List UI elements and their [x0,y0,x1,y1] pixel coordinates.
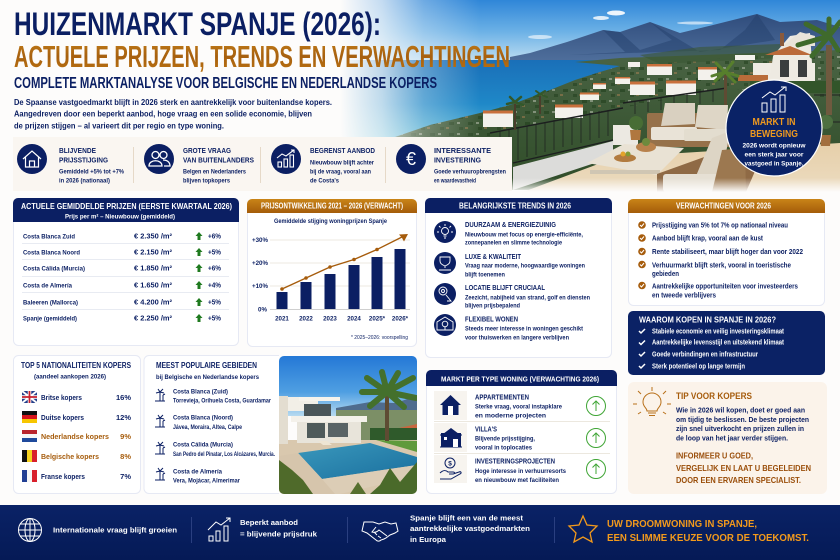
expectation text: Aanbod blijft krap, vooral aan de kust [652,234,764,242]
price rows: € 1.850 /m² [134,264,173,272]
flag: Germany [22,411,37,423]
region list: San Pedro del Pinatar, Los Alcázares, Murcia. [173,452,275,458]
trend: flexibel wonen: Steeds meer interesse in woningen geschikt [465,326,584,332]
footer item: beperkt aanbod: = blijvende prijsdruk [240,530,318,538]
panel: tip voor kopers: TIP VOOR KOPERS [676,391,752,401]
fact: interessante investering: € [406,149,416,169]
panel: waarom kopen in Spanje [628,311,825,375]
fact: grote vraag [144,144,254,184]
panel: meest populaire gebieden [144,356,279,494]
region list: Costa Blanca (Zuid) [173,388,228,396]
panel: waarom kopen in Spanje: WAAROM KOPEN IN SPANJE IN 2026? [639,314,776,324]
fact: blijvende prijsstijging [17,144,124,184]
fact: begrenst aanbod: de Costa's [310,178,339,184]
bar chart with trend line: 0% [258,306,267,314]
panel: verwachtingen voor 2026 [628,199,825,306]
price rows: € 4.200 /m² [134,298,173,306]
sofa [647,103,740,147]
type header: MARKT PER TYPE WONING (VERWACHTING 2026) [441,374,599,384]
type: villa's: vooral in toplocaties [475,444,532,452]
trend: duurzaam: Nieuwbouw met focus op energie-efficiënte, [465,232,583,238]
type: appartementen: APPARTEMENTEN [475,394,529,402]
title line 2: ACTUELE PRIJZEN, TRENDS EN VERWACHTINGEN [14,39,510,74]
nationality rows: 7% [120,472,131,481]
region list: Jávea, Moraira, Altea, Calpe [173,425,243,431]
panel: tip voor kopers: DOOR EEN ERVAREN SPECIALIST. [676,475,801,485]
price rows: € 2.150 /m² [134,248,173,256]
trends header: BELANGRIJKSTE TRENDS IN 2026 [459,202,572,210]
expectations header [628,199,825,213]
fact: interessante investering: en waardevastheid [434,178,476,184]
flag: France [22,470,37,482]
nationality rows: 16% [116,393,131,402]
potted plants [629,115,833,146]
footer item: beperkt aanbod [208,518,318,541]
chart header [247,199,417,213]
type: villa's: Blijvende prijsstijging, [475,436,535,442]
footer item: spanje blijft [362,514,530,544]
trend: luxe: blijft toenemen [465,272,505,278]
type: villa's [434,423,606,452]
trend: flexibel wonen: voor thuiswerken en langere verblijven [465,334,569,342]
hero badge: markt in beweging: 2026 wordt opnieuw [742,142,806,150]
panel: waarom kopen in Spanje: Stabiele economie en veilig investeringsklimaat [652,328,785,336]
trend: duurzaam [434,221,583,246]
footer slogan: EEN SLIMME KEUZE VOOR DE TOEKOMST. [607,532,809,544]
type: appartementen: en moderne projecten [475,412,546,420]
region list: Costa Cálida (Murcia) [173,442,233,448]
price rows: € 2.250 /m² [134,314,173,322]
fact: begrenst aanbod: bij de vraag, vooral aan [310,168,371,176]
armchair [657,131,765,192]
icon: palm trees [155,389,165,480]
footer item: internationale vraag [18,518,177,542]
region list: Torrevieja, Orihuela Costa, Guardamar [173,398,272,404]
nationality rows: Nederlandse kopers [41,432,109,441]
nationality rows: Duitse kopers [41,413,84,422]
expectation text: en tweede verblijvers [652,290,716,300]
bar chart with trend line: 2021 [275,316,289,322]
price rows: +4% [208,280,222,290]
nationality rows: 12% [116,413,131,422]
trend: luxe [434,252,585,278]
region list: Costa Blanca (Noord) [173,414,233,422]
trend: duurzaam: zonnepanelen en slimme technologie [465,240,562,246]
footer item: internationale vraag: Internationale vraag blijft groeien [53,526,177,534]
title [14,6,510,92]
expectation text: Aantrekkelijke opportuniteiten voor investeerders [652,282,798,290]
fact: blijvende prijsstijging: PRIJSSTIJGING [59,156,108,164]
fact: begrenst aanbod [271,144,375,184]
intro paragraph [14,97,332,130]
footer item: spanje blijft: Spanje blijft een van de meest [410,514,524,522]
type: appartementen [434,391,606,420]
footer banner [0,505,840,560]
region list [173,388,275,484]
footer item: beperkt aanbod: Beperkt aanbod [240,518,298,527]
chart header: PRIJSONTWIKKELING 2021 – 2026 (VERWACHT) [261,202,403,210]
nationality rows: 8% [120,452,131,461]
fact: begrenst aanbod: BEGRENST AANBOD [310,146,375,155]
panel: actuele prijzen [13,198,239,346]
type: investeringsprojecten: INVESTERINGSPROJECTEN [475,458,555,466]
fact: blijvende prijsstijging: BLIJVENDE [59,146,96,155]
bar chart with trend line: 2023 [323,316,337,322]
green up arrows [196,232,202,322]
price rows: Costa de Almería [23,282,72,290]
key facts strip [13,137,512,191]
hero badge: markt in beweging: een sterk jaar voor [744,152,804,158]
bar chart with trend line: +10% [252,283,268,290]
bar chart with trend line: 2026* [392,316,409,322]
chart subtitle: Gemiddelde stijging woningprijzen Spanje [274,218,387,225]
hero badge: markt in beweging [726,80,822,176]
prices header [13,198,239,222]
intro paragraph: Aangedreven door een beperkt aanbod, hoge vraag en een solide economie, blijven [14,108,312,118]
coffee table with bowl [587,138,684,175]
panel: tip voor kopers: de loop van het jaar verder stijgen. [676,434,788,442]
panel: meest populaire gebieden: bij Belgische en Nederlandse kopers [156,374,259,381]
expectations header: VERWACHTINGEN VOOR 2026 [676,202,772,210]
trend: flexibel wonen [434,314,584,342]
icon: light bulb [633,387,671,416]
footer slogan: UW DROOMWONING IN SPANJE, [607,518,757,530]
intro paragraph: de prijzen stijgen – al varieert dit per regio en type woning. [14,120,224,130]
nationality rows: Britse kopers [41,393,82,402]
trend: locatie: Zeezicht, nabijheid van strand, golf en diensten [465,294,590,302]
type: appartementen: Sterke vraag, vooral instapklare [475,404,562,410]
type: investeringsprojecten [434,455,606,484]
expectation text: Rente stabiliseert, maar blijft hoger dan voor 2022 [652,247,803,256]
panel: top 5 nationaliteiten: (aandeel aankopen 2026) [34,374,106,380]
panel: waarom kopen in Spanje: Aantrekkelijke levensstijl en uitstekend klimaat [652,340,785,346]
trend: locatie [434,283,590,310]
footer item: spanje blijft: in Europa [410,535,447,544]
price rows: +5% [208,298,222,306]
region list: Vera, Mojácar, Almerimar [173,478,241,484]
fact: grote vraag: Belgen en Nederlanders [183,168,246,176]
photo: villa with pool [279,356,417,494]
expectation text: Prijsstijging van 5% tot 7% op nationaal niveau [652,220,788,230]
fact: interessante investering: INTERESSANTE [434,146,491,155]
panel: tip voor kopers [628,382,827,494]
price rows: Costa Blanca Noord [23,250,80,256]
type: investeringsprojecten: $ [448,460,452,468]
nationality rows: Franse kopers [41,472,85,481]
panel: waarom kopen in Spanje: Sterk potentieel op lange termijn [652,364,745,370]
flag: Belgium [22,450,37,462]
price rows: +5% [208,248,222,256]
hero badge: markt in beweging: vastgoed in Spanje. [744,160,804,168]
nationality rows [41,393,131,481]
hero badge: markt in beweging: BEWEGING [750,129,798,140]
price rows [23,232,222,322]
type: investeringsprojecten: en nieuwbouw met faciliteiten [475,477,559,484]
icon: star [569,516,597,542]
trend: luxe: LUXE & KWALITEIT [465,254,522,261]
fact: interessante investering: INVESTERING [434,156,481,164]
fact: interessante investering: Goede verhuuropbrengsten [434,168,506,176]
panel: tip voor kopers: VERGELIJK EN LAAT U BEGELEIDEN [676,463,811,473]
price rows: +5% [208,314,222,322]
footer slogan [607,518,809,544]
price rows: Costa Blanca Zuid [23,234,75,240]
trend: flexibel wonen: FLEXIBEL WONEN [465,316,518,324]
fact: grote vraag: VAN BUITENLANDERS [183,156,254,164]
expectation text: gebieden [652,269,679,278]
region list: Costa de Almería [173,468,222,476]
prices header: Prijs per m² – Nieuwbouw (gemiddeld) [65,214,175,220]
price rows: +6% [208,232,222,240]
panel: meest populaire gebieden: MEEST POPULAIRE GEBIEDEN [156,361,257,370]
panel: top 5 nationaliteiten [14,356,140,494]
fact: grote vraag: blijven topkopers [183,178,230,184]
bar chart with trend line: +20% [252,260,268,267]
bar chart with trend line: 2025* [369,316,386,322]
nationality rows: Belgische kopers [41,452,99,461]
price rows: € 2.350 /m² [134,232,173,240]
flag: Netherlands [22,430,37,442]
fact: blijvende prijsstijging: Gemiddeld +5% tot +7% [59,168,124,176]
bar chart with trend line: +30% [252,237,268,244]
forecast note: * 2025–2026: voorspelling [351,335,408,341]
intro paragraph: De Spaanse vastgoedmarkt blijft in 2026 sterk en aantrekkelijk voor buitenlandse kopers. [14,97,332,107]
bar chart with trend line: 2022 [299,316,313,322]
palm trees [507,19,840,130]
trend: luxe: Vraag naar moderne, hoogwaardige woningen [465,262,585,270]
fact: interessante investering [396,144,506,184]
panel: markt per type woning [426,370,617,494]
expectation text: Verhuurmarkt blijft sterk, vooral in toeristische [652,260,791,270]
type header [426,370,617,386]
title line 1: HUIZENMARKT SPANJE (2026): [14,6,381,42]
panel: belangrijkste trends [425,198,612,358]
fact: grote vraag: GROTE VRAAG [183,146,231,155]
panel: top 5 nationaliteiten: TOP 5 NATIONALITEITEN KOPERS [21,361,132,370]
type: villa's: VILLA'S [475,426,497,434]
type: investeringsprojecten: Hoge interesse in verhuurresorts [475,468,566,475]
bar chart with trend line: 2024 [347,316,361,322]
trends header [425,198,612,213]
panel: tip voor kopers: INFORMEER U GOED, [676,450,753,460]
flag: UK [22,391,37,403]
price rows: Baleeren (Mallorca) [23,300,78,306]
prices header: ACTUELE GEMIDDELDE PRIJZEN (EERSTE KWARTAAL 2026) [21,202,232,211]
price rows: € 1.650 /m² [134,280,173,290]
expectation text [652,220,803,300]
fact: blijvende prijsstijging: in 2026 (nationaal) [59,178,110,184]
bar chart with trend line [252,234,410,322]
nationality rows: 9% [120,432,131,441]
price rows: Costa Cálida (Murcia) [23,266,85,272]
price rows: +6% [208,264,222,272]
trend: locatie: LOCATIE BLIJFT CRUCIAAL [465,285,546,292]
trend: locatie: blijven prijsbepalend [465,302,520,310]
price rows: Spanje (gemiddeld) [23,316,77,322]
expectation bullets [638,221,646,289]
hero photo: Spanish coast terrace [340,0,840,192]
hero badge: markt in beweging: MARKT IN [752,117,796,128]
subtitle: COMPLETE MARKTANALYSE VOOR BELGISCHE EN NEDERLANDSE KOPERS [14,75,437,92]
panel: tip voor kopers: om tijdig te beslissen. De beste projecten [676,415,809,424]
panel: tip voor kopers: zijn snel uitverkocht en prijzen zullen in [676,424,804,433]
panel: waarom kopen in Spanje: Goede verbindingen en infrastructuur [652,352,758,358]
panel: prijsontwikkeling chart [247,199,417,346]
trend: duurzaam: DUURZAAM & ENERGIEZUINIG [465,222,556,229]
panel: tip voor kopers: Wie in 2026 wil kopen, doet er goed aan [676,406,805,414]
footer item: spanje blijft: aantrekkelijke vastgoedmarkten [410,524,530,533]
fact: begrenst aanbod: Nieuwbouw blijft achter [310,160,374,166]
